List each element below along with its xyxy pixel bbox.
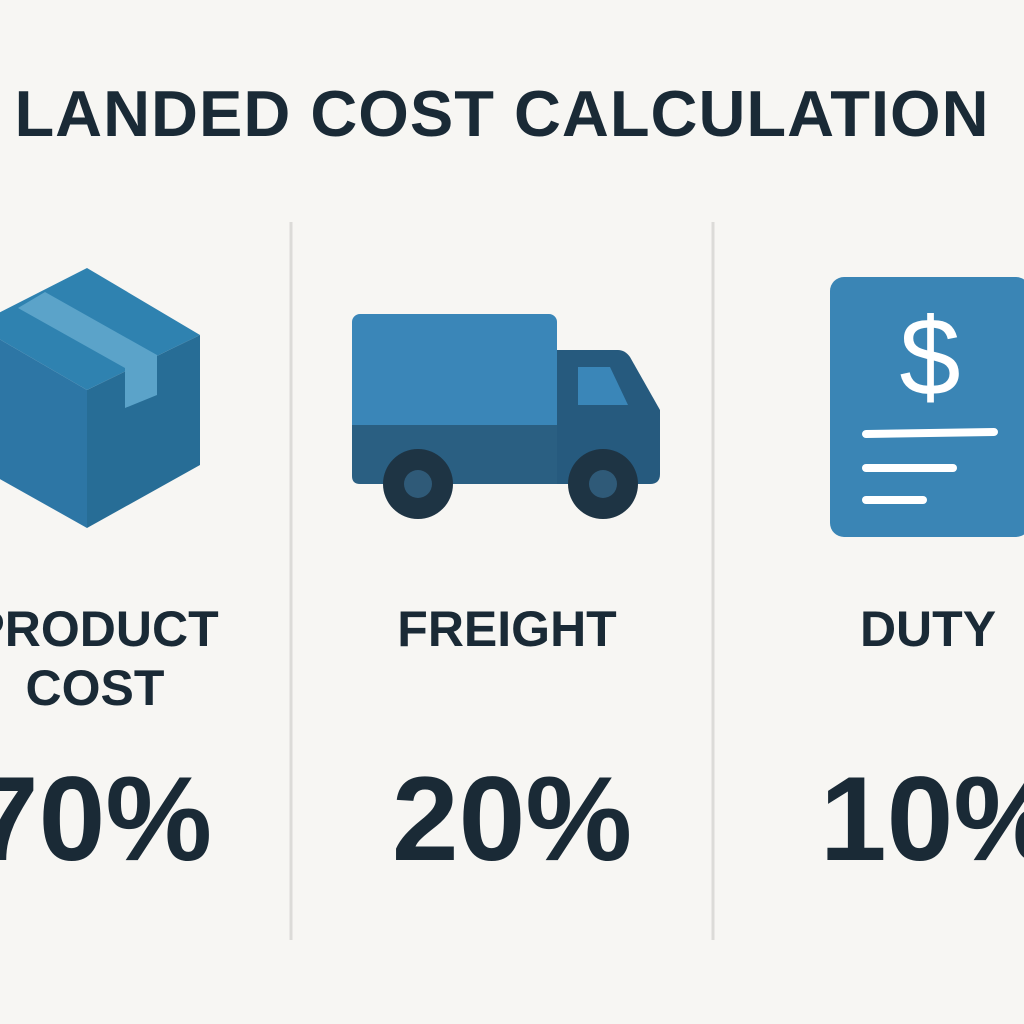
value: 20%: 20% bbox=[392, 752, 632, 886]
label: duty: DUTY bbox=[860, 601, 996, 657]
panel: freight bbox=[352, 314, 660, 886]
icon: truck bbox=[352, 314, 660, 519]
panel: product cost: COST bbox=[26, 660, 164, 716]
label: freight: FREIGHT bbox=[397, 601, 617, 657]
panel: duty bbox=[820, 277, 1024, 886]
icon: invoice document: $ bbox=[899, 296, 961, 419]
title: LANDED COST CALCULATION bbox=[14, 77, 990, 150]
icon: invoice document bbox=[830, 277, 1024, 537]
icon: box bbox=[0, 268, 200, 528]
panel: product cost bbox=[0, 268, 219, 886]
